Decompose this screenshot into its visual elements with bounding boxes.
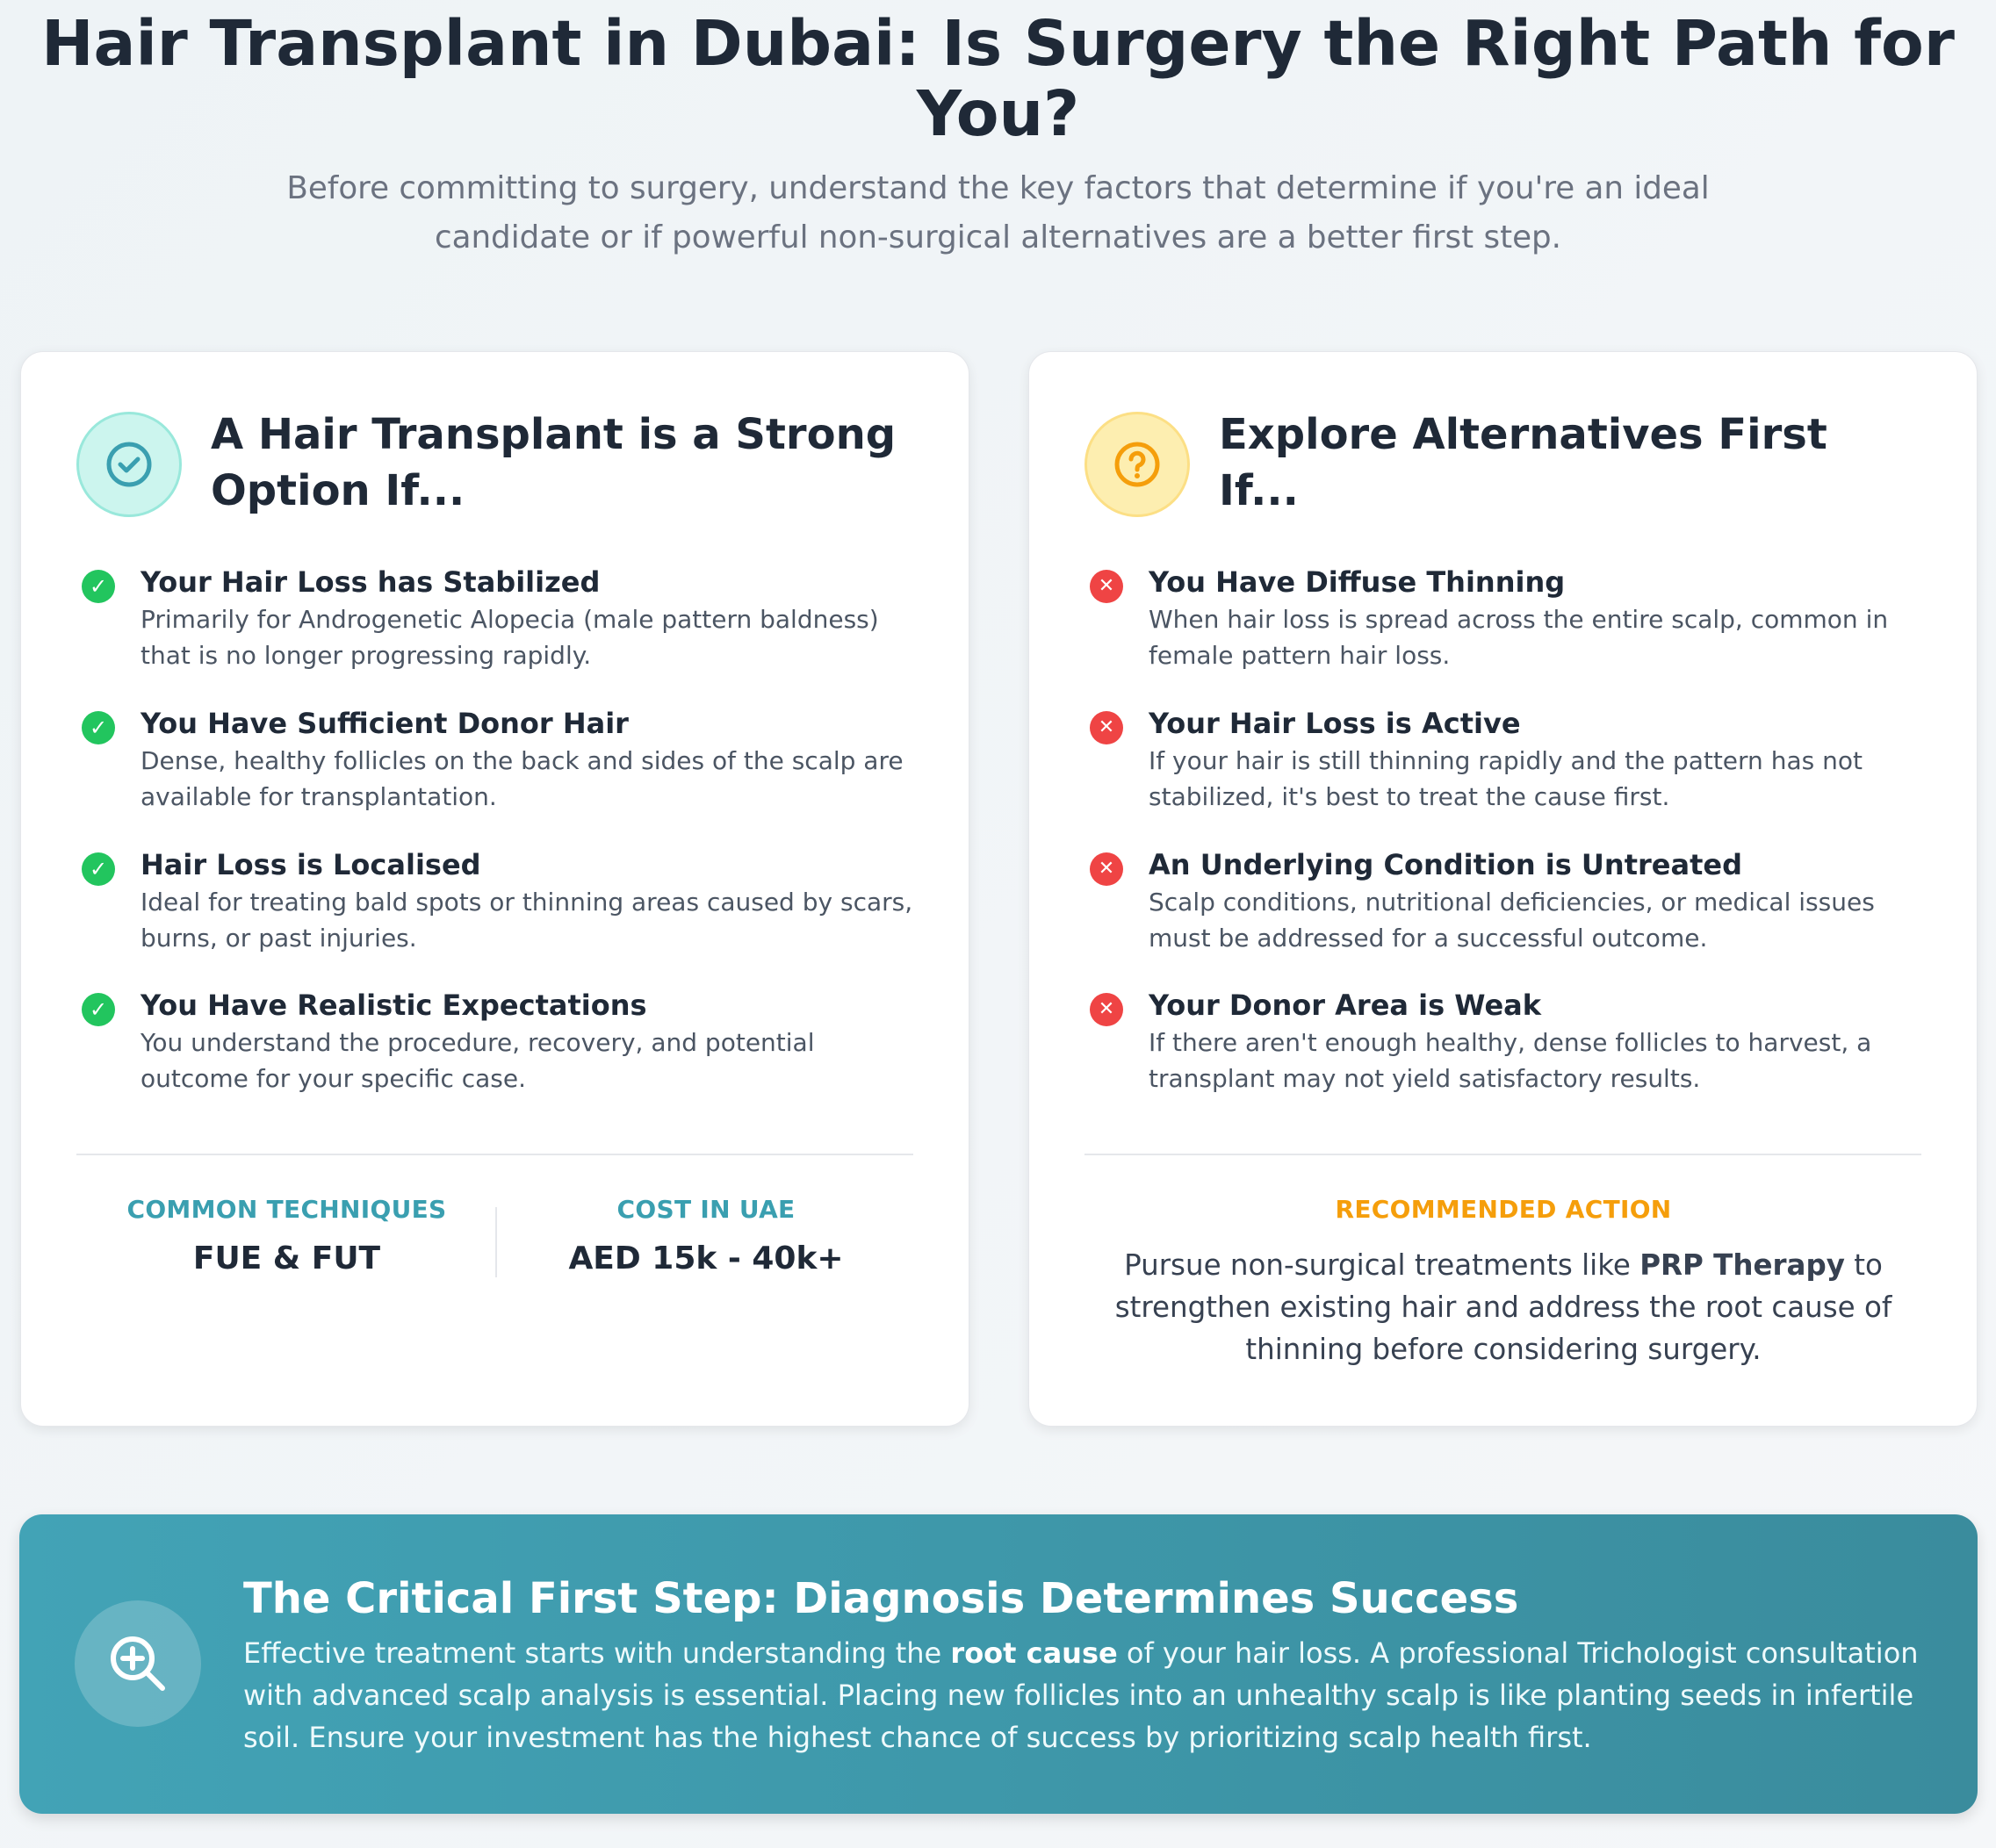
item 1 bbox=[1090, 565, 1888, 670]
panel: alternatives bbox=[1028, 351, 1978, 1427]
item 3: Scalp conditions, nutritional deficiencies, or medical issues bbox=[1149, 888, 1875, 917]
heading: Option If... bbox=[211, 466, 465, 515]
item 3: ✓ bbox=[90, 857, 107, 881]
item 1: ✕ bbox=[1099, 575, 1114, 597]
item 4: ✕ bbox=[1099, 998, 1114, 1020]
item 2: Dense, healthy follicles on the back and sides of the scalp are bbox=[141, 746, 904, 775]
item 4: Your Donor Area is Weak bbox=[1149, 989, 1541, 1022]
item 4 bbox=[1090, 989, 1871, 1093]
heading: Explore Alternatives First bbox=[1219, 410, 1827, 459]
item 3: ✕ bbox=[1099, 858, 1114, 880]
item 2: stabilized, it's best to treat the cause first. bbox=[1149, 782, 1669, 811]
item 1: female pattern hair loss. bbox=[1149, 641, 1450, 670]
subtitle: Before committing to surgery, understand the key factors that determine if you're an ideal bbox=[286, 170, 1710, 206]
item 2: ✓ bbox=[90, 715, 107, 740]
recommended action: Pursue non-surgical treatments like PRP Therapy to bbox=[1124, 1248, 1883, 1282]
item 1: When hair loss is spread across the entire scalp, common in bbox=[1149, 605, 1888, 634]
heading bbox=[1219, 410, 1827, 515]
banner text: Effective treatment starts with understanding the root cause of your hair loss. A professional Trichologist consultation with advanced scalp analysis is essential. Placing new follicles into an unhealthy scalp is like planting seeds in infertile soil. Ensure your investment has the highest chance of success by prioritizing scalp health first. bbox=[243, 1636, 1919, 1754]
banner: diagnosis bbox=[19, 1514, 1978, 1814]
title: Hair Transplant in Dubai: Is Surgery the Right Path for bbox=[41, 7, 1955, 80]
item 1 bbox=[82, 565, 879, 670]
item 1: You Have Diffuse Thinning bbox=[1149, 565, 1565, 599]
item 2 bbox=[82, 707, 904, 811]
item 2: If your hair is still thinning rapidly and the pattern has not bbox=[1149, 746, 1863, 775]
item 4: ✓ bbox=[90, 997, 107, 1022]
subtitle bbox=[286, 170, 1710, 255]
item 3: must be addressed for a successful outcome. bbox=[1149, 924, 1707, 953]
item 3 bbox=[82, 848, 912, 953]
stat: techniques: FUE & FUT bbox=[193, 1240, 380, 1276]
title bbox=[41, 7, 1955, 150]
item 1: Primarily for Androgenetic Alopecia (male pattern baldness) bbox=[141, 605, 879, 634]
item 4: You understand the procedure, recovery, and potential bbox=[141, 1028, 814, 1057]
item 1: Your Hair Loss has Stabilized bbox=[141, 565, 600, 599]
heading bbox=[211, 410, 896, 515]
item 2: available for transplantation. bbox=[141, 782, 497, 811]
recommended action: thinning before considering surgery. bbox=[1245, 1333, 1762, 1366]
banner heading: The Critical First Step: Diagnosis Determines Success bbox=[243, 1574, 1518, 1623]
item 1: that is no longer progressing rapidly. bbox=[141, 641, 591, 670]
subtitle: candidate or if powerful non-surgical alternatives are a better first step. bbox=[435, 219, 1561, 255]
item 4: outcome for your specific case. bbox=[141, 1064, 526, 1093]
stat: cost bbox=[568, 1195, 844, 1276]
panel: strong option bbox=[20, 351, 969, 1427]
item 3: Hair Loss is Localised bbox=[141, 848, 481, 881]
recommended action: RECOMMENDED ACTION bbox=[1335, 1195, 1672, 1224]
item 4: You Have Realistic Expectations bbox=[141, 989, 647, 1022]
item 2: ✕ bbox=[1099, 716, 1114, 738]
stat: cost: AED 15k - 40k+ bbox=[568, 1240, 844, 1276]
icon: check circle bbox=[76, 412, 182, 517]
item 3: Ideal for treating bald spots or thinning areas caused by scars, bbox=[141, 888, 912, 917]
stat: cost: COST IN UAE bbox=[617, 1195, 795, 1224]
item 2: You Have Sufficient Donor Hair bbox=[141, 707, 629, 740]
icon: question circle bbox=[1084, 412, 1190, 517]
stat: techniques bbox=[126, 1195, 447, 1276]
recommended action bbox=[1115, 1195, 1892, 1366]
item 3: burns, or past injuries. bbox=[141, 924, 417, 953]
icon: magnifier bbox=[75, 1600, 201, 1727]
item 4: transplant may not yield satisfactory results. bbox=[1149, 1064, 1700, 1093]
item 4: If there aren't enough healthy, dense follicles to harvest, a bbox=[1149, 1028, 1871, 1057]
item 2: Your Hair Loss is Active bbox=[1149, 707, 1521, 740]
item 3 bbox=[1090, 848, 1875, 953]
recommended action: strengthen existing hair and address the root cause of bbox=[1115, 1291, 1892, 1324]
stat: techniques: COMMON TECHNIQUES bbox=[126, 1195, 447, 1224]
title: You? bbox=[917, 77, 1079, 150]
item 1: ✓ bbox=[90, 574, 107, 599]
item 2 bbox=[1090, 707, 1863, 811]
item 4 bbox=[82, 989, 814, 1093]
heading: If... bbox=[1219, 466, 1299, 515]
heading: A Hair Transplant is a Strong bbox=[211, 410, 896, 459]
item 3: An Underlying Condition is Untreated bbox=[1149, 848, 1742, 881]
